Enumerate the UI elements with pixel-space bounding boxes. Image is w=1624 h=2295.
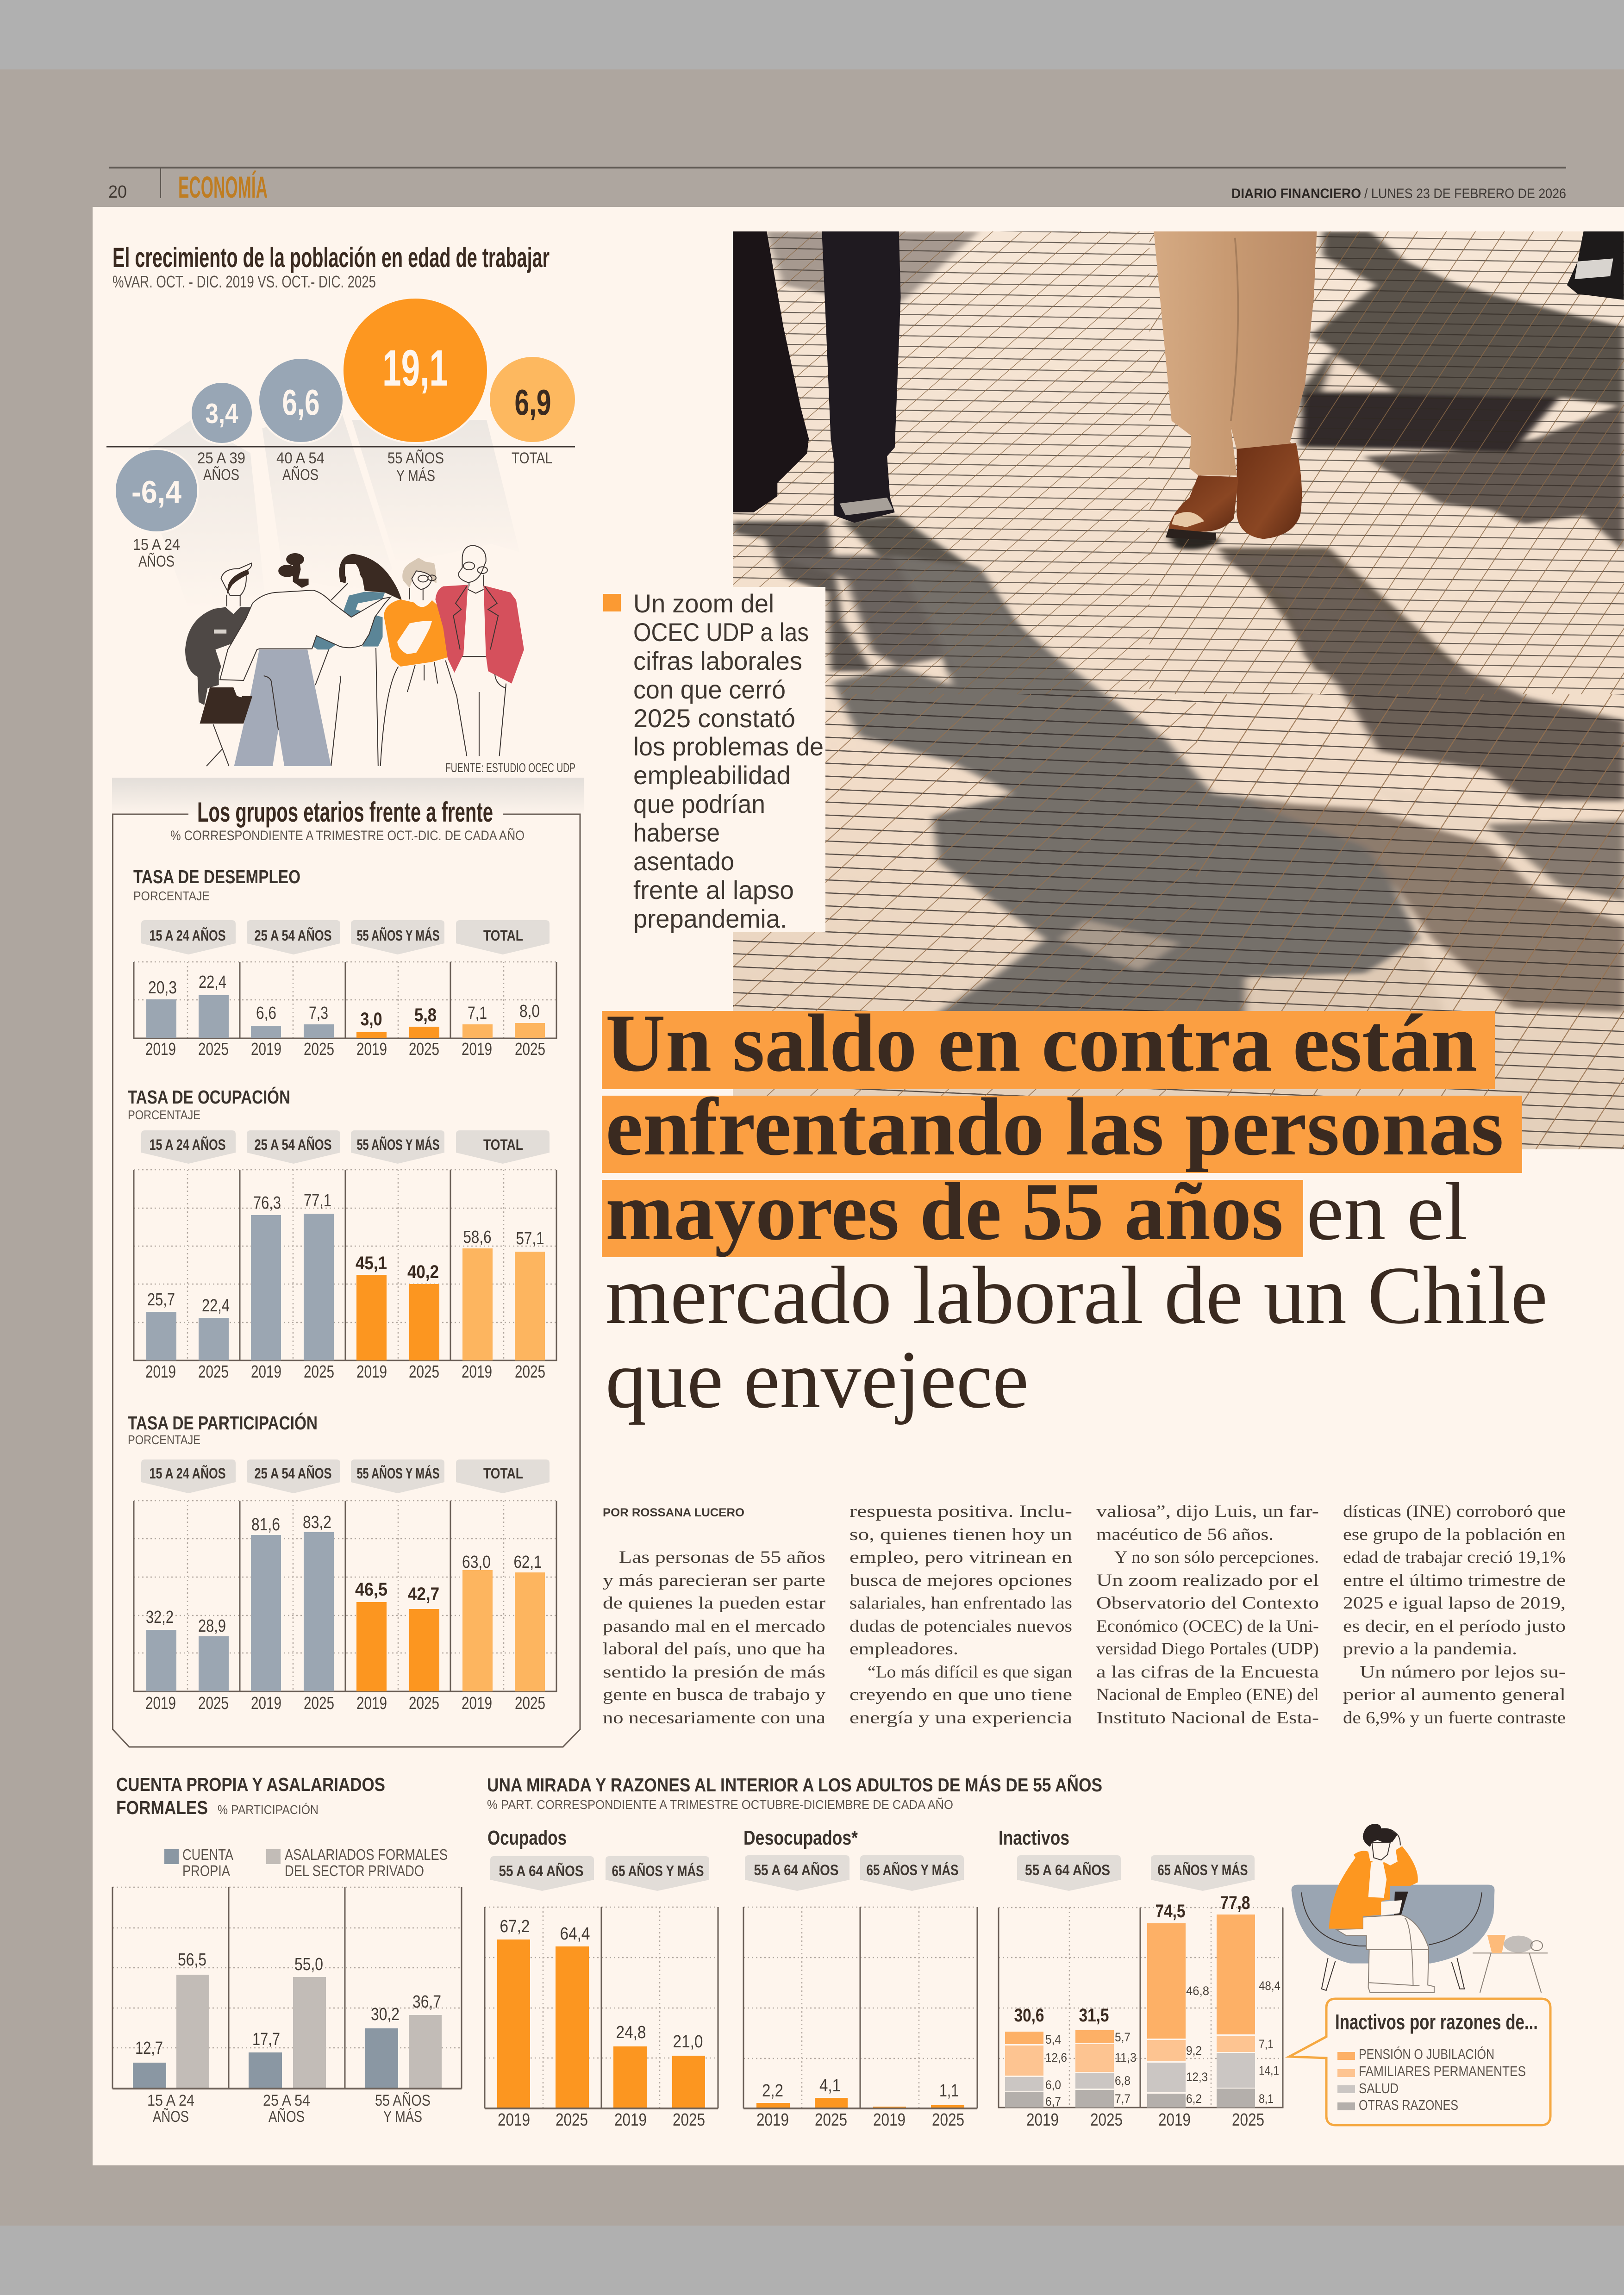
values [146,1513,542,1636]
age tabs: 25 A 54 AÑOS [255,927,331,944]
panel frame [112,778,584,1747]
segment values: 12,6 [1045,2051,1067,2064]
heading: FORMALES [116,1797,208,1818]
chart: 15 A 24 [147,2092,194,2109]
age tabs: 25 A 54 AÑOS [255,1136,331,1153]
article body: ese grupo de la población en [1343,1525,1566,1544]
year labels [145,1040,545,1059]
chart: tasa de ocupación: PORCENTAJE [128,1108,200,1122]
stacked bars [1005,1915,1255,2108]
heading [487,1774,1102,1812]
shadows upper area [733,231,1624,671]
callout: zoom del OCEC: cifras laborales [633,646,802,675]
heading: crecimiento: El crecimiento de la población en edad de trabajar [112,242,550,273]
values: 40,2 [407,1262,439,1282]
legend: CUENTA [182,1846,233,1863]
year labels: 2019 [356,1040,387,1059]
values: 3,0 [360,1009,382,1029]
article body: Un número por lejos su- [1360,1663,1566,1682]
year labels: 2019 [251,1362,281,1382]
page header: DIARIO FINANCIERO [1231,186,1361,201]
article body: Las personas de 55 años [619,1548,825,1567]
callout: zoom del OCEC: OCEC UDP a las [633,617,809,647]
article body: de 6,9% y un fuerte contraste [1343,1709,1566,1727]
values: 45,1 [356,1253,387,1273]
chart: ocupados: 2025 [673,2110,705,2130]
callout: inactivos por razones de: OTRAS RAZONES [1359,2097,1458,2113]
bubble: 25 a 39 años: 25 A 39 [197,449,245,467]
bubble: total: TOTAL [512,449,552,467]
values [147,1191,544,1316]
age tabs: 15 A 24 AÑOS [149,927,226,944]
panel: una mirada y razones [485,1774,1550,2130]
bubble: total: 6,9 [515,382,551,423]
values: 7,3 [309,1004,328,1023]
chart: desocupados: 55 A 64 AÑOS [754,1862,839,1878]
article body: so, quienes tienen hoy un [849,1525,1072,1544]
age tabs: 15 A 24 AÑOS [149,1136,226,1153]
article body: entre el último trimestre de [1343,1571,1566,1590]
bubble: 25 a 39 años [191,382,253,484]
headline: Un saldo en contra están [606,997,1477,1089]
bars [146,1214,545,1360]
chart: desocupados: 2,2 [762,2081,783,2101]
article body: dudas de potenciales nuevos [849,1617,1072,1636]
age tabs: 25 A 54 AÑOS [255,1465,331,1482]
chart: 36,7 [412,1992,441,2012]
chart: 55,0 [294,1955,323,1974]
chart: tasa de participación [128,1412,556,1713]
chart: ocupados: 67,2 [500,1917,530,1936]
age tabs [141,1130,550,1164]
legend: PROPIA [182,1862,230,1879]
bars [146,995,545,1038]
chart: tasa de desempleo [133,866,556,1059]
chart: ocupados [485,1827,718,2130]
segment values: 7,7 [1115,2092,1131,2106]
bubble: 40 a 54 años [258,358,344,484]
chart: Y MÁS [383,2108,422,2126]
chart: desocupados: 65 AÑOS Y MÁS [867,1862,958,1878]
page header: 20 [108,182,127,202]
article body: salariales, han enfrentado las [849,1594,1072,1613]
totals: 77,8 [1220,1893,1250,1913]
values: 77,1 [304,1191,331,1210]
article body: Instituto Nacional de Esta- [1096,1709,1319,1727]
values: 62,1 [514,1553,542,1572]
callout: inactivos por razones de: FAMILIARES PERMANENTES [1359,2063,1526,2079]
age tabs: 55 AÑOS Y MÁS [356,927,440,944]
year labels: 2025 [409,1362,439,1382]
chart: inactivos: 65 AÑOS Y MÁS [1157,1862,1248,1878]
values: 83,2 [303,1513,331,1532]
year labels: 2025 [304,1040,334,1059]
chart: inactivos: 2025 [1232,2110,1264,2130]
chart: ocupados: 2025 [556,2110,588,2130]
year labels: 2019 [462,1694,492,1713]
chart: desocupados: 4,1 [819,2076,841,2095]
values: 81,6 [251,1515,280,1534]
bubble: 15 a 24 años: AÑOS [138,553,175,570]
values: 42,7 [408,1584,439,1604]
article body: “Lo más difícil es que sigan [868,1663,1072,1682]
bubble: 15 a 24 años: -6,4 [131,474,181,510]
segment values: 5,4 [1045,2033,1061,2046]
chart: tasa de participación: TASA DE PARTICIPACIÓN [128,1412,318,1434]
bubble: 40 a 54 años: AÑOS [282,466,319,484]
year labels: 2025 [198,1362,229,1382]
year labels: 2019 [251,1694,281,1713]
panel heading: % CORRESPONDIENTE A TRIMESTRE OCT.-DIC. DE CADA AÑO [170,828,525,843]
article body: laboral del país, uno que ha [603,1640,825,1659]
chart: desocupados: 2019 [756,2110,789,2130]
article body: macéutico de 56 años. [1096,1525,1274,1544]
chart: ocupados: Ocupados [487,1827,567,1849]
article body: Y no son sólo percepciones. [1114,1548,1319,1567]
year labels: 2025 [198,1040,229,1059]
age tabs: TOTAL [483,1465,523,1482]
chart: inactivos: Inactivos [999,1827,1069,1849]
values: 6,6 [256,1004,276,1023]
values: 58,6 [463,1228,492,1247]
bubble: 15 a 24 años: 15 A 24 [133,536,180,554]
segment values: 11,3 [1115,2051,1137,2064]
heading: % PART. CORRESPONDIENTE A TRIMESTRE OCTUBRE-DICIEMBRE DE CADA AÑO [487,1797,953,1812]
bubble: 55 años y más [343,298,488,485]
article body: dísticas (INE) corroboró que [1343,1502,1566,1521]
values [148,973,540,1029]
legend: DEL SECTOR PRIVADO [285,1862,424,1879]
callout: zoom del OCEC: prepandemia. [633,904,787,933]
headline [602,997,1548,1425]
bubble: 15 a 24 años [115,449,198,570]
values: 76,3 [253,1193,281,1213]
page header [108,168,1566,204]
bubble: 55 años y más: 55 AÑOS [387,449,444,467]
year labels [145,1362,545,1382]
year labels: 2019 [251,1040,281,1059]
chart: tasa de ocupación [128,1086,556,1382]
heading [116,1774,385,1818]
year labels: 2025 [409,1694,439,1713]
callout: zoom del OCEC: Un zoom del [633,589,774,618]
chart: AÑOS [269,2108,305,2126]
legend: ASALARIADOS FORMALES [285,1846,448,1863]
chart: desocupados: 2019 [873,2110,906,2130]
year labels: 2025 [515,1362,545,1382]
chart: desocupados [743,1827,977,2130]
page header: ECONOMÍA [178,170,268,204]
chart: inactivos: 2019 [1026,2110,1059,2130]
year labels: 2025 [304,1694,334,1713]
article body: a las cifras de la Encuesta [1096,1663,1319,1682]
age tabs: 15 A 24 AÑOS [149,1465,226,1482]
segment values: 9,2 [1186,2044,1202,2058]
values: 8,0 [519,1002,540,1021]
segment values: 6,2 [1186,2092,1202,2106]
segment values [1045,1979,1280,2108]
article body: valiosa”, dijo Luis, un far- [1096,1502,1319,1521]
headline: mayores de 55 años [606,1166,1283,1257]
chart: ocupados: 2019 [498,2110,530,2130]
callout: zoom del OCEC: haberse [633,818,720,847]
panel heading: Los grupos etarios frente a frente [197,797,493,828]
shadows lower area [712,555,1624,1016]
values: 46,5 [355,1579,387,1600]
callout: zoom del OCEC: los problemas de [633,732,824,761]
year labels: 2025 [515,1040,545,1059]
article body: creyendo en que uno tiene [849,1685,1072,1704]
chart: desocupados: 1,1 [939,2081,959,2101]
totals [1014,1893,1250,2026]
chart: inactivos: 55 A 64 AÑOS [1025,1862,1110,1878]
callout: inactivos por razones de: PENSIÓN O JUBILACIÓN [1359,2046,1494,2062]
year labels: 2025 [198,1694,229,1713]
values: 5,8 [414,1005,437,1025]
age tabs: 55 AÑOS Y MÁS [356,1136,440,1153]
values: 7,1 [468,1004,487,1023]
year labels: 2019 [356,1362,387,1382]
segment values: 6,7 [1045,2095,1061,2108]
values: 25,7 [147,1290,175,1310]
values: 57,1 [516,1229,544,1248]
chart: 30,2 [371,2005,400,2024]
chart: ocupados: 2019 [614,2110,647,2130]
article body: respuesta positiva. Inclu- [849,1502,1072,1521]
year labels: 2019 [356,1694,387,1713]
chart: 17,7 [252,2030,280,2049]
paving grid [733,231,1624,1149]
bubble: 25 a 39 años: AÑOS [203,466,239,484]
age tabs: TOTAL [483,927,523,944]
segment values: 14,1 [1259,2064,1279,2077]
bubble: 40 a 54 años: 40 A 54 [276,449,325,467]
panel heading [170,797,525,843]
chart: 56,5 [178,1950,206,1970]
light beams behind bubbles [142,407,519,610]
year labels: 2019 [145,1040,176,1059]
segment values: 6,0 [1045,2078,1061,2092]
callout: zoom del OCEC [597,587,825,933]
callout: zoom del OCEC: 2025 constató [633,704,795,733]
chart: AÑOS [153,2108,189,2126]
legs and shoes [733,231,1624,541]
legend [164,1846,448,1879]
year labels: 2025 [515,1694,545,1713]
chart: desocupados: Desocupados* [743,1827,858,1849]
segment values: 6,8 [1115,2074,1131,2088]
chart: 55 AÑOS [375,2092,431,2109]
age tabs: 55 AÑOS Y MÁS [356,1465,440,1482]
article body: POR ROSSANA LUCERO [603,1506,744,1519]
panel: cuenta propia y asalariados formales [112,1774,462,2126]
chart [112,1887,462,2126]
chart: inactivos [999,1827,1283,2130]
segment values: 48,4 [1259,1979,1280,1993]
chart: ocupados: 65 AÑOS Y MÁS [612,1863,704,1879]
article body: de quienes la pueden estar [603,1594,825,1613]
callout: zoom del OCEC: que podrían [633,789,765,818]
bubble: 55 años y más: 19,1 [382,340,448,397]
chart: ocupados: 55 A 64 AÑOS [499,1863,583,1879]
totals: 30,6 [1014,2005,1044,2026]
values: 63,0 [462,1553,491,1572]
chart: tasa de participación: PORCENTAJE [128,1433,200,1447]
article body: perior al aumento general [1343,1685,1566,1704]
values: 28,9 [198,1616,226,1636]
article body: versidad Diego Portales (UDP) [1096,1640,1319,1659]
article body: 2025 e igual lapso de 2019, [1343,1594,1566,1613]
bars [146,1532,545,1691]
year labels: 2019 [462,1362,492,1382]
chart: tasa de desempleo: TASA DE DESEMPLEO [133,866,300,887]
article body: energía y una experiencia [849,1709,1072,1727]
article body: empleo, pero vitrinean en [849,1548,1072,1567]
chart: ocupados: 21,0 [673,2032,703,2052]
article body: Un zoom realizado por el [1096,1571,1319,1590]
segment values: 46,8 [1186,1984,1209,1998]
panel: grupos etarios frente a frente [112,778,584,1747]
illustration: group of people [185,545,524,766]
article body: Nacional de Empleo (ENE) del [1096,1685,1319,1704]
values: 22,4 [202,1296,230,1316]
article body: gente en busca de trabajo y [603,1685,826,1704]
values: 20,3 [148,978,177,998]
chart: ocupados: 24,8 [616,2023,646,2042]
chart: inactivos: 2025 [1090,2110,1123,2130]
year labels: 2019 [462,1040,492,1059]
article body: es decir, en el período justo [1343,1617,1566,1636]
article body: Observatorio del Contexto [1096,1594,1319,1613]
year labels: 2025 [304,1362,334,1382]
values: 22,4 [199,973,226,992]
headline: enfrentando las personas [606,1081,1504,1172]
heading: CUENTA PROPIA Y ASALARIADOS [116,1774,385,1795]
article body: previo a la pandemia. [1343,1640,1517,1659]
callout: zoom del OCEC: asentado [633,847,734,876]
age tabs: TOTAL [483,1136,523,1153]
article body: Económico (OCEC) de la Uni- [1096,1617,1319,1636]
callout: zoom del OCEC: frente al lapso [633,875,794,904]
age tabs [141,920,550,954]
article body: no necesariamente con una [603,1709,825,1727]
panel: crecimiento de la población [106,242,576,775]
chart: inactivos: 2019 [1158,2110,1191,2130]
article body: pasando mal en el mercado [603,1617,825,1636]
headline: en el [1306,1166,1468,1257]
axis line [106,446,575,447]
age tabs [141,1459,550,1493]
headline: que envejece [606,1334,1029,1425]
article body: empleadores. [849,1640,958,1659]
article body: busca de mejores opciones [849,1571,1072,1590]
heading: crecimiento [112,242,550,291]
totals: 74,5 [1156,1901,1185,1921]
callout: inactivos por razones de: Inactivos por razones de... [1335,2010,1538,2034]
illustration: woman on armchair with phone [1292,1824,1548,1993]
photo: legs and shadows on paved street [712,231,1624,1149]
callout: inactivos por razones de: SALUD [1359,2080,1399,2096]
heading: crecimiento: %VAR. OCT. - DIC. 2019 VS. OCT.- DIC. 2025 [112,272,376,291]
callout: zoom del OCEC: con que cerró [633,675,786,704]
callout: inactivos por razones de [1289,1999,1550,2125]
segment values: 8,1 [1259,2092,1274,2106]
chart: desocupados: 2025 [932,2110,964,2130]
heading: UNA MIRADA Y RAZONES AL INTERIOR A LOS ADULTOS DE MÁS DE 55 AÑOS [487,1774,1102,1796]
article body: edad de trabajar creció 19,1% [1343,1548,1566,1567]
bubble: 40 a 54 años: 6,6 [282,382,319,423]
year labels: 2019 [145,1362,176,1382]
chart: tasa de ocupación: TASA DE OCUPACIÓN [128,1086,290,1108]
chart: desocupados: 2025 [815,2110,847,2130]
year labels [145,1694,545,1713]
totals: 31,5 [1079,2005,1109,2026]
segment values: 12,3 [1186,2070,1208,2084]
year labels: 2025 [409,1040,439,1059]
callout: zoom del OCEC: empleabilidad [633,761,791,790]
values: 32,2 [146,1608,174,1627]
source note: FUENTE: ESTUDIO OCEC UDP [445,761,575,775]
article body [603,1502,1566,1727]
headline: mercado laboral de un Chile [606,1249,1548,1341]
article body: y más parecieran ser parte [603,1571,825,1590]
segment values: 5,7 [1115,2030,1131,2044]
chart: ocupados: 64,4 [560,1924,590,1944]
bubble: 55 años y más: Y MÁS [396,467,435,485]
article body: sentido la presión de más [603,1663,825,1682]
chart: tasa de desempleo: PORCENTAJE [133,889,210,903]
year labels: 2019 [145,1694,176,1713]
heading: % PARTICIPACIÓN [218,1802,319,1817]
segment values: 7,1 [1259,2037,1274,2051]
page header: / LUNES 23 DE FEBRERO DE 2026 [1364,186,1566,201]
bubble: 25 a 39 años: 3,4 [206,398,238,429]
chart: 12,7 [135,2039,163,2058]
bubble: total [489,356,576,467]
chart: 25 A 54 [263,2092,310,2109]
